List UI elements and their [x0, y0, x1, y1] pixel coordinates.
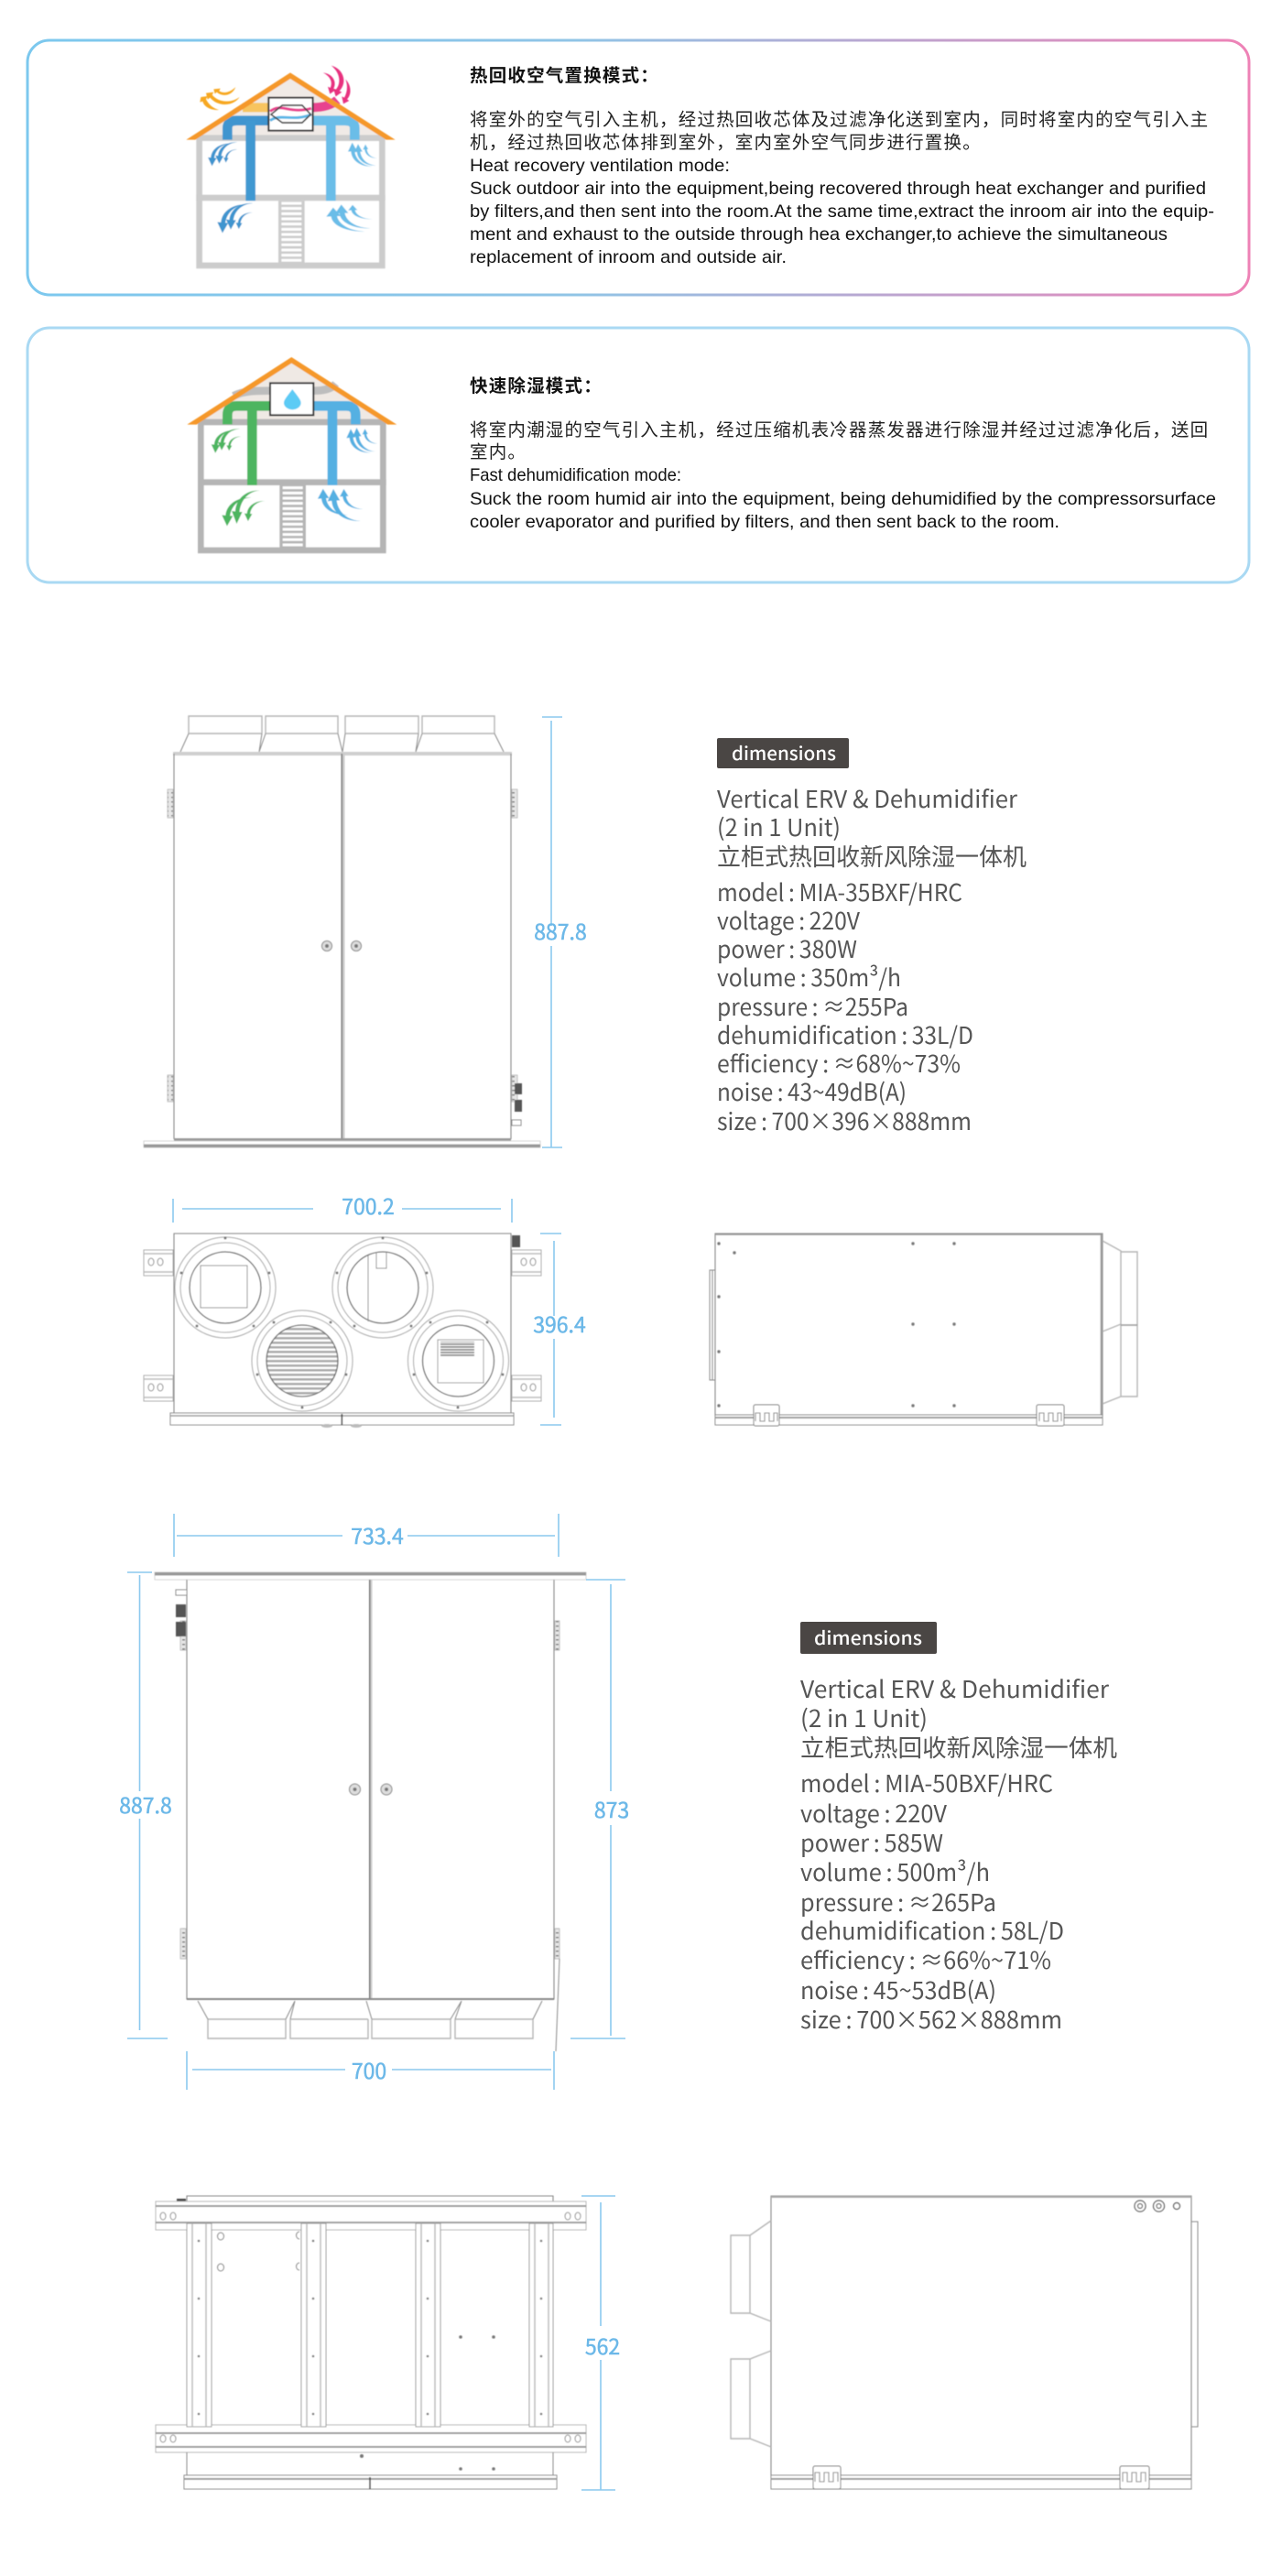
panel: heat recovery ventilation mode — [27, 40, 1249, 295]
heading: heat recovery mode: 热回收空气置换模式： — [470, 65, 659, 86]
text block: MIA-35 specifications: model : MIA-35BXF/HRC — [717, 875, 962, 908]
dimension: height 887.8 — [119, 1572, 172, 2038]
dimension: height 887.8: 887.8 — [534, 915, 587, 946]
drawing: MIA-50 front elevation — [155, 1572, 586, 2051]
text block: MIA-50 specifications: volume : 500m³/h — [800, 1854, 990, 1888]
badge: dimensions: dimensions — [814, 1624, 922, 1650]
vertical channels — [187, 2223, 553, 2427]
badge: dimensions: dimensions — [732, 739, 836, 766]
text block: MIA-35 specifications: voltage : 220V — [717, 903, 860, 937]
text block: heat recovery description: Heat recovery ventilation mode: — [470, 156, 730, 176]
panel: fast dehumidification mode — [27, 328, 1249, 582]
text block: fast dehumidification description: 室内。 — [470, 442, 527, 462]
text block: MIA-50 specifications: model : MIA-50BXF/HRC — [800, 1766, 1053, 1799]
duct openings — [175, 1237, 509, 1411]
text block: MIA-35 specifications: efficiency : ≈68%~73% — [717, 1046, 961, 1080]
text block: fast dehumidification description — [470, 420, 1216, 532]
text block: MIA-50 specifications: pressure : ≈265Pa — [800, 1885, 996, 1918]
dimension: width 700.2: 700.2 — [342, 1190, 395, 1221]
badge: dimensions — [717, 738, 849, 768]
drawing: MIA-35 plan view with four duct openings — [144, 1234, 541, 1428]
text block: MIA-35 specifications: Vertical ERV & Dehumidifier — [717, 781, 1018, 815]
text block: heat recovery description: Suck outdoor air into the equipment,being recovered through heat exchanger and purified — [470, 179, 1206, 199]
text block: MIA-50 specifications: 立柜式热回收新风除湿一体机 — [800, 1730, 1117, 1764]
dimension: height 887.8 — [534, 717, 587, 1147]
dimension: width 700.2 — [173, 1190, 512, 1223]
dimension: width 700 — [187, 2051, 554, 2090]
drawing: MIA-35 side view — [710, 1234, 1137, 1426]
dimension: depth 562: 562 — [585, 2330, 620, 2361]
text block: heat recovery description: by filters,and then sent into the room.At the same time,extract the inroom air into the equip- — [470, 201, 1214, 222]
mounting brackets — [144, 1250, 541, 1401]
text block: MIA-50 specifications: noise : 45~53dB(A) — [800, 1973, 996, 2006]
text block: MIA-50 specifications: efficiency : ≈66%~71% — [800, 1942, 1051, 1976]
text block: MIA-50 specifications: dehumidification : 58L/D — [800, 1913, 1064, 1947]
badge: dimensions — [800, 1622, 937, 1654]
text block: MIA-50 specifications: voltage : 220V — [800, 1796, 947, 1830]
drawing: MIA-50 side view — [731, 2196, 1198, 2489]
text block: heat recovery description: ment and exhaust to the outside through hea exchanger,to achieve the simultaneous — [470, 224, 1168, 245]
icon: house with dehumidification airflow — [187, 357, 397, 550]
dimension: width 733.4 — [174, 1514, 559, 1557]
text block: MIA-35 specifications: dehumidification : 33L/D — [717, 1017, 973, 1051]
text block: heat recovery description: 将室外的空气引入主机，经过热回收芯体及过滤净化送到室内，同时将室内的空气引入主 — [470, 110, 1209, 130]
bottom duct collars — [208, 2019, 533, 2038]
text block: MIA-50 specifications: (2 in 1 Unit) — [800, 1701, 928, 1734]
drawing: MIA-50 underside view with rails — [156, 2196, 586, 2489]
text block: MIA-35 specifications: volume : 350m³/h — [717, 960, 901, 994]
dimension: width 700: 700 — [352, 2054, 386, 2085]
text block: MIA-50 specifications: power : 585W — [800, 1825, 943, 1859]
heading: fast dehumidification mode: 快速除湿模式： — [470, 375, 603, 397]
dimension: height 873: 873 — [594, 1793, 629, 1824]
icon: house with heat recovery airflow — [186, 66, 396, 266]
text block: MIA-50 specifications: size : 700×562×888mm — [800, 2002, 1062, 2036]
text block: MIA-50 specifications: Vertical ERV & Dehumidifier — [800, 1671, 1110, 1705]
text block: heat recovery description — [470, 110, 1214, 267]
text block: heat recovery description: replacement of inroom and outside air. — [470, 247, 787, 267]
top duct collars — [189, 716, 494, 734]
text block: MIA-35 specifications: pressure : ≈255Pa — [717, 989, 908, 1023]
drawing: MIA-35 front elevation — [144, 716, 540, 1147]
dimension: depth 396.4: 396.4 — [533, 1308, 586, 1339]
text block: MIA-50 specifications — [800, 1671, 1117, 2036]
text block: MIA-35 specifications: noise : 43~49dB(A) — [717, 1074, 907, 1108]
text block: MIA-35 specifications: size : 700×396×888mm — [717, 1103, 972, 1137]
rails — [156, 2201, 586, 2452]
dimension: height 887.8: 887.8 — [119, 1788, 172, 1820]
text block: MIA-35 specifications: power : 380W — [717, 931, 857, 965]
text block: fast dehumidification description: Suck the room humid air into the equipment, being dehumidified by the compressorsurface — [470, 489, 1216, 509]
text block: fast dehumidification description: Fast dehumidification mode: — [470, 465, 681, 485]
text block: heat recovery description: 机，经过热回收芯体排到室外，室内室外空气同步进行置换。 — [470, 133, 982, 153]
text block: MIA-35 specifications — [717, 781, 1027, 1137]
text block: fast dehumidification description: cooler evaporator and purified by filters, and then sent back to the room. — [470, 512, 1059, 532]
text block: fast dehumidification description: 将室内潮湿的空气引入主机，经过压缩机表冷器蒸发器进行除湿并经过过滤净化后，送回 — [470, 420, 1209, 440]
dimension: depth 562 — [581, 2196, 620, 2490]
dimension: depth 396.4 — [533, 1234, 586, 1425]
text block: MIA-35 specifications: (2 in 1 Unit) — [717, 810, 841, 843]
dimension: width 733.4: 733.4 — [351, 1519, 404, 1550]
dimension: height 873 — [570, 1580, 629, 2038]
text block: MIA-35 specifications: 立柜式热回收新风除湿一体机 — [717, 839, 1027, 873]
